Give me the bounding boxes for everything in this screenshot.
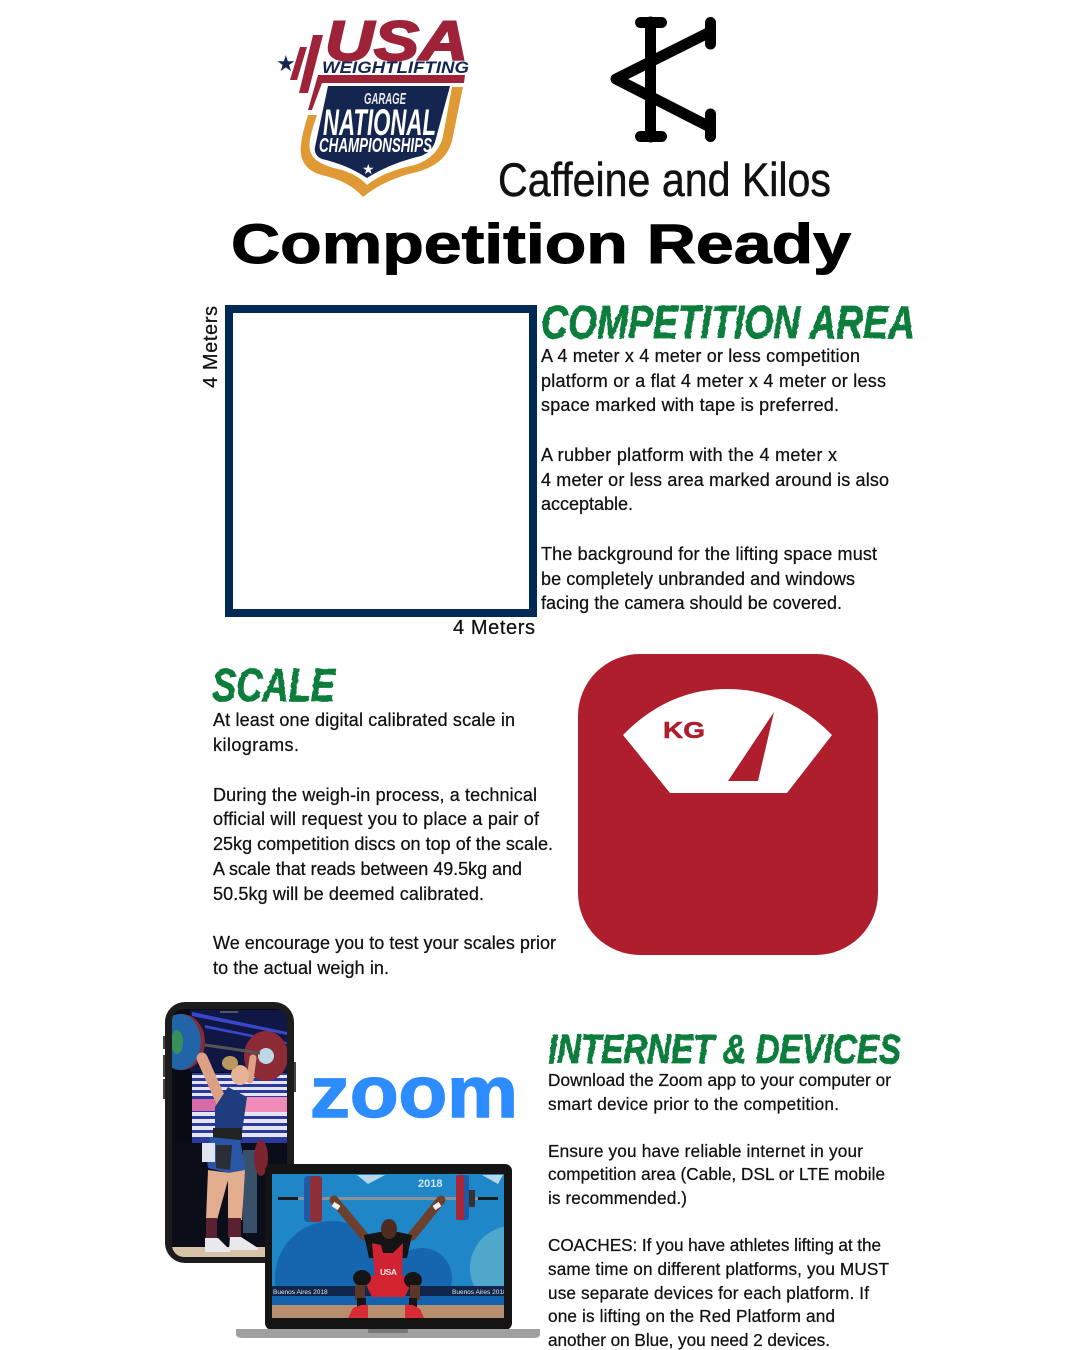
text block: rubber platform: 4 meter or less area marked around is also [541, 470, 889, 490]
laptop [236, 1164, 554, 1338]
text block: download zoom [548, 1070, 891, 1114]
text block: coaches: one is lifting on the Red Platform and [548, 1306, 835, 1326]
text block: background [541, 544, 877, 613]
wordmark: Caffeine and Kilos [498, 153, 831, 206]
text block: weigh-in process: During the weigh-in process, a technical [213, 785, 537, 805]
LED stripes [192, 1073, 287, 1143]
laptop photo: squat snatch: USA [380, 1267, 397, 1277]
logo: USA Weightlifting Garage National Championships [276, 9, 469, 197]
text block: rubber platform: A rubber platform with the 4 meter x [541, 445, 837, 465]
CHAMPIONSHIPS: CHAMPIONSHIPS [319, 135, 432, 157]
zoom wordmark: zoom [310, 1053, 518, 1133]
logo: Caffeine and Kilos [498, 22, 831, 206]
barbell mark [290, 35, 465, 110]
white star: ★ [362, 161, 375, 177]
icon: red kilogram scale [578, 654, 878, 955]
text block: platform [541, 346, 886, 415]
text block: reliable internet: Ensure you have reliable internet in your [548, 1141, 863, 1161]
panel: competition area [541, 296, 915, 613]
laptop photo: squat snatch: 2018 [418, 1178, 442, 1190]
phone speaker notch [220, 1011, 238, 1013]
text block: coaches [548, 1235, 890, 1350]
laptop photo: squat snatch: Buenos Aires 2018 [273, 1289, 328, 1296]
text block: weigh-in process: 50.5kg will be deemed calibrated. [213, 884, 484, 904]
text block: reliable internet: is recommended.) [548, 1188, 687, 1208]
text block: coaches: another on Blue, you need 2 devices. [548, 1330, 830, 1350]
text block: rubber platform [541, 445, 889, 514]
icon: barbell K [616, 22, 710, 137]
device illustration: phone and laptop with Zoom [159, 1002, 554, 1338]
text block: weigh-in process [213, 785, 553, 904]
heading: COMPETITION AREA [541, 296, 915, 348]
text block: encouragement: to the actual weigh in. [213, 958, 389, 978]
heading: INTERNET & DEVICES [548, 1026, 901, 1072]
text block: encouragement: We encourage you to test your scales prior [213, 933, 556, 953]
text block: coaches: COACHES: If you have athletes lifting at the [548, 1235, 881, 1255]
text block: requirement: kilograms. [213, 735, 299, 755]
panel: internet and devices [548, 1026, 901, 1350]
text block: background: be completely unbranded and windows [541, 569, 855, 589]
text block: reliable internet [548, 1141, 885, 1208]
text block: background: facing the camera should be covered. [541, 593, 842, 613]
NATIONAL: NATIONAL [323, 102, 436, 143]
text block: platform: A 4 meter x 4 meter or less competition [541, 346, 860, 366]
text block: encouragement [213, 933, 556, 978]
bottom dimension label: 4 Meters [453, 617, 535, 639]
plates [172, 1014, 205, 1070]
title: Competition Ready [231, 212, 851, 275]
navy shield [315, 86, 450, 178]
text block: background: The background for the lifting space must [541, 544, 877, 564]
needle [728, 712, 774, 781]
text block: weigh-in process: 25kg competition discs on top of the scale. [213, 834, 553, 854]
text block: weigh-in process: official will request you to place a pair of [213, 809, 540, 829]
barbell [298, 1197, 478, 1200]
star: ★ [276, 51, 296, 76]
text block: platform: platform or a flat 4 meter x 4 meter or less [541, 371, 886, 391]
text block: weigh-in process: A scale that reads between 49.5kg and [213, 859, 522, 879]
text block: download zoom: Download the Zoom app to your computer or [548, 1070, 891, 1090]
dial [623, 689, 832, 793]
text block: download zoom: smart device prior to the competition. [548, 1094, 839, 1114]
diagram: 4 meter square competition area [200, 306, 535, 639]
phone photo: snatch lift [172, 1009, 287, 1257]
athlete [334, 1200, 441, 1236]
WEIGHTLIFTING: WEIGHTLIFTING [322, 58, 469, 77]
GARAGE: GARAGE [364, 91, 407, 108]
text block: requirement: At least one digital calibrated scale in [213, 710, 515, 730]
text block: reliable internet: competition area (Cable, DSL or LTE mobile [548, 1164, 885, 1184]
platform square [229, 309, 533, 613]
text block: rubber platform: acceptable. [541, 494, 633, 514]
phone [159, 1002, 296, 1263]
laptop photo: squat snatch [272, 1174, 504, 1318]
laptop photo: squat snatch: Buenos Aires 2018 [452, 1289, 507, 1296]
text block: platform: space marked with tape is preferred. [541, 395, 839, 415]
athlete [202, 1058, 222, 1103]
text block: requirement [213, 710, 515, 755]
arena lights [190, 1010, 287, 1072]
text block: coaches: use separate devices for each platform. If [548, 1283, 869, 1303]
panel: scale [212, 659, 556, 978]
left dimension label: 4 Meters [200, 306, 222, 388]
orange shield [301, 87, 463, 197]
heading: SCALE [212, 659, 336, 711]
USA: USA [325, 9, 468, 72]
KG label: KG [663, 717, 705, 743]
text block: coaches: same time on different platforms, you MUST [548, 1259, 890, 1279]
